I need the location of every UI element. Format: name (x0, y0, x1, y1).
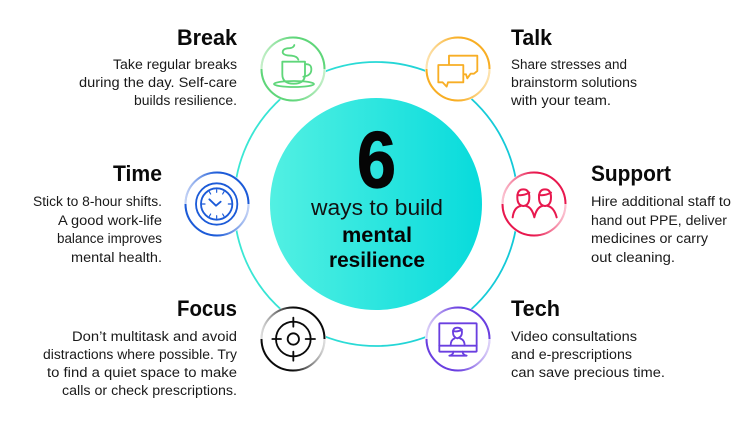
text block: Break: Break (177, 25, 238, 50)
bold subtitle: mental (342, 224, 412, 247)
text block: Support: out cleaning. (591, 250, 675, 265)
text block: Time: mental health. (71, 250, 162, 265)
text block: Focus (43, 296, 237, 398)
text block: Focus: Focus (177, 296, 237, 321)
text block: Break: builds resilience. (134, 93, 237, 108)
text block: Support: hand out PPE, deliver (591, 213, 728, 228)
connecting ring (234, 62, 518, 346)
text block: Break: Take regular breaks (113, 57, 237, 72)
icon: video consultation monitor (425, 306, 491, 372)
text block: Talk: brainstorm solutions (511, 75, 637, 90)
icon: crosshair target (260, 306, 326, 372)
text block: Talk: Share stresses and (511, 57, 627, 72)
text block: Tech: Tech (511, 296, 560, 321)
text block: Tech: Video consultations (511, 329, 637, 344)
text block: Time: Stick to 8-hour shifts. (33, 194, 162, 209)
bold subtitle (329, 224, 425, 272)
text block: Break (79, 25, 238, 108)
text block: Talk: Talk (511, 25, 553, 50)
text block: Focus: to find a quiet space to make (47, 365, 237, 380)
icon: coffee cup (260, 36, 326, 102)
icon: two people (501, 171, 567, 237)
text block: Tech: and e-prescriptions (511, 347, 632, 362)
text block: Focus: distractions where possible. Try (43, 347, 237, 362)
text block: Support: medicines or carry (591, 231, 708, 246)
icon: speech bubbles (425, 36, 491, 102)
text block: Time: balance improves (57, 231, 162, 246)
text block: Talk: with your team. (510, 93, 611, 108)
text block: Support (591, 161, 731, 265)
text block: Time: A good work-life (58, 213, 162, 228)
icon: clock (184, 171, 250, 237)
text block: Tech: can save precious time. (511, 365, 665, 380)
big number 6: 6 (357, 115, 396, 204)
bold subtitle: resilience (329, 249, 425, 272)
text block: Focus: calls or check prescriptions. (62, 383, 237, 398)
central circle (270, 98, 482, 310)
text block: Support: Hire additional staff to (591, 194, 731, 209)
text block: Time: Time (113, 161, 162, 186)
text block: Time (33, 161, 162, 265)
subtitle line: ways to build (310, 195, 443, 220)
text block: Support: Support (591, 161, 672, 186)
text block: Focus: Don’t multitask and avoid (72, 329, 237, 344)
text block: Break: during the day. Self-care (79, 75, 237, 90)
text block: Talk (510, 25, 637, 108)
text block: Tech (511, 296, 665, 380)
